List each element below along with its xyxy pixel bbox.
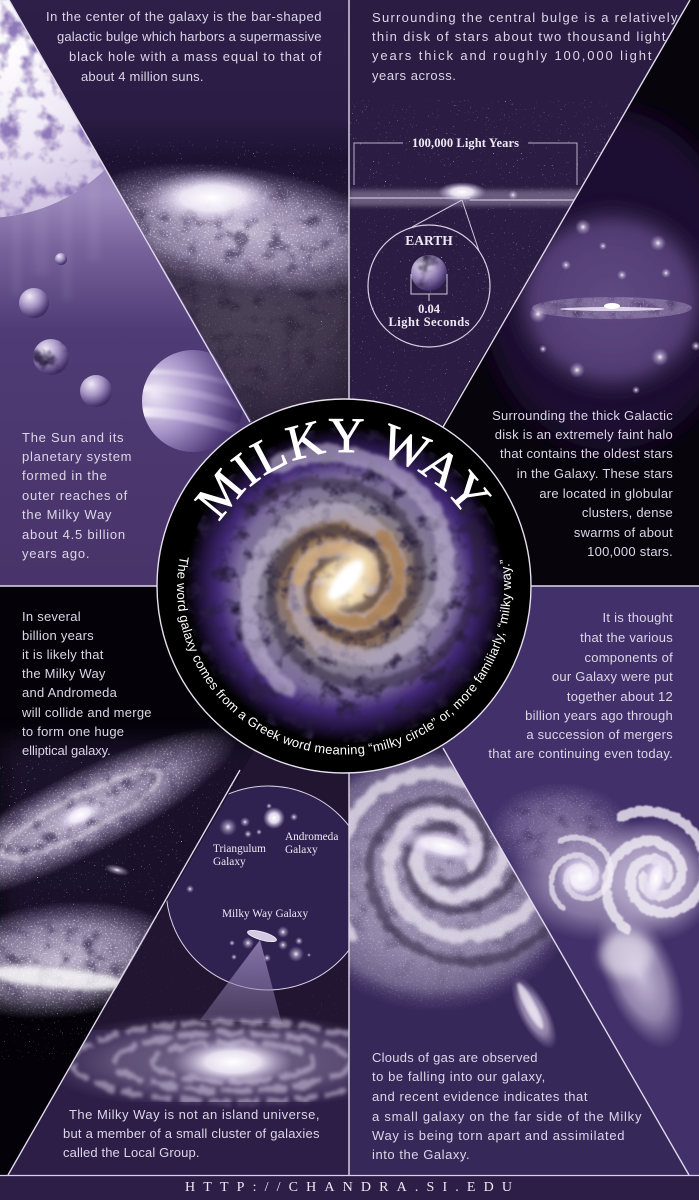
text: halo: 100,000 stars.	[587, 544, 673, 559]
image: merging galaxies	[488, 782, 699, 1061]
title arc path	[220, 452, 478, 540]
text: halo	[492, 408, 673, 559]
panel: disk of stars	[350, 0, 689, 426]
shade behind text	[150, 1102, 315, 1110]
beam	[200, 940, 282, 1024]
text: mergers: that are continuing even today.	[488, 746, 673, 761]
sun rays	[16, 254, 69, 296]
text: clouds of gas: Clouds of gas are observed	[372, 1050, 538, 1065]
image: sun	[0, 0, 106, 218]
text: sun: formed in the	[22, 468, 108, 483]
image: large swirl galaxy	[350, 746, 558, 1008]
text: collision: In several	[22, 609, 81, 624]
text: sun	[22, 430, 132, 561]
text: collision: billion years	[22, 628, 94, 643]
label: andromeda: Andromeda	[285, 831, 338, 843]
text: halo: clusters, dense	[582, 505, 673, 520]
earth circle	[368, 225, 490, 347]
group spots	[186, 803, 311, 962]
planet: small	[55, 253, 67, 265]
text: halo: Surrounding the thick Galactic	[492, 408, 673, 423]
text: mergers	[488, 610, 673, 761]
footer strip	[0, 1175, 699, 1200]
panel: clouds of gas	[350, 746, 688, 1175]
text: clouds of gas	[372, 1050, 642, 1162]
milky way small	[247, 930, 277, 942]
image: halo disk	[529, 219, 699, 394]
text: sun: outer reaches of	[22, 488, 128, 503]
label: triangulum: Galaxy	[213, 856, 246, 868]
panel: sun and planets	[0, 0, 252, 586]
text: halo: that contains the oldest stars	[500, 446, 673, 461]
panel: mergers	[442, 586, 699, 1175]
triangulum galaxy	[220, 818, 236, 836]
andromeda galaxy	[263, 807, 285, 829]
spiral galaxy image	[186, 427, 506, 743]
text: halo: disk is an extremely faint halo	[495, 427, 673, 442]
text: local group: The Milky Way is not an island universe,	[69, 1107, 320, 1122]
text: clouds of gas: to be falling into our galaxy,	[372, 1069, 546, 1084]
text: mergers: It is thought	[603, 610, 673, 625]
text: mergers: that the various	[580, 630, 673, 645]
earth bracket	[411, 274, 447, 301]
text: galactic bulge: black hole with a mass equal to that of	[69, 49, 322, 64]
text: galactic bulge: In the center of the galaxy is the bar-shaped	[46, 9, 322, 24]
labels: local group	[213, 831, 338, 920]
diagram: scale of the disk	[354, 136, 577, 347]
label: earth: EARTH	[405, 233, 453, 248]
image: dust lane	[0, 902, 156, 1018]
text: halo: are located in globular	[539, 486, 673, 501]
caption arc path	[177, 556, 511, 755]
local group circle	[166, 786, 348, 990]
text: halo: swarms of about	[574, 525, 673, 540]
label: milky way galaxy: Milky Way Galaxy	[222, 908, 308, 920]
text: clouds of gas: into the Galaxy.	[372, 1147, 470, 1162]
text: local group	[63, 1107, 320, 1160]
text: galactic bulge: about 4 million suns.	[81, 69, 204, 84]
label: triangulum: Triangulum	[213, 843, 266, 855]
title: MILKY WAY	[194, 418, 492, 522]
text: mergers: billion years ago through	[525, 708, 673, 723]
text: galactic bulge: galactic bulge which harbors a supermassive	[57, 29, 322, 44]
icon: earth	[411, 255, 447, 291]
image: andromeda	[0, 728, 234, 892]
label: light seconds: Light Seconds	[388, 315, 470, 329]
text: local group: called the Local Group.	[63, 1145, 200, 1160]
label: 100,000 light years: 100,000 Light Years	[412, 136, 519, 150]
text: collision: to form one huge	[22, 724, 124, 739]
text: local group: but a member of a small cluster of galaxies	[63, 1126, 320, 1141]
image: galaxy bulge	[112, 164, 348, 419]
text: collision: it is likely that	[22, 647, 104, 662]
text: mergers: our Galaxy were put	[552, 669, 673, 684]
text: mergers: components of	[584, 650, 673, 665]
text: sun: years ago.	[22, 546, 90, 561]
text: disk: Surrounding the central bulge is a relatively	[372, 10, 678, 25]
text: collision	[21, 609, 152, 758]
planet: earth-like	[33, 339, 69, 375]
label: 0.04: 0.04	[418, 302, 441, 316]
text: disk: thin disk of stars about two thousand light	[372, 29, 666, 44]
image: small companion galaxy	[105, 864, 129, 876]
image: small galaxy	[512, 979, 556, 1048]
text: disk: years thick and roughly 100,000 light	[372, 48, 652, 63]
milky way disc	[156, 398, 532, 774]
planet: venus-like	[80, 375, 112, 407]
image: galaxy face	[64, 1015, 348, 1108]
text: disk: years across.	[372, 68, 456, 83]
text: collision: and Andromeda	[22, 685, 118, 700]
text: sun: about 4.5 billion	[22, 527, 126, 542]
planet: mars-like	[19, 288, 49, 318]
panel: local group	[9, 750, 348, 1175]
caption: The word galaxy comes from a Greek word meaning “milky circle” or, more familiarly, “milky way.”	[177, 558, 514, 756]
planet: jupiter	[142, 350, 245, 452]
zoom lines	[412, 200, 479, 251]
text: sun: the Milky Way	[22, 507, 112, 522]
text: galactic bulge	[46, 9, 322, 84]
text: sun: planetary system	[22, 449, 132, 464]
panel: halo	[442, 0, 699, 585]
panel: galactic bulge	[10, 0, 348, 422]
text: clouds of gas: Way is being torn apart and assimilated	[372, 1128, 625, 1143]
panel: andromeda collision	[0, 720, 254, 1068]
text: disk	[372, 10, 678, 83]
text: clouds of gas: a small galaxy on the far side of the Milky	[372, 1109, 642, 1124]
text: collision: will collide and merge	[21, 705, 152, 720]
bracket	[354, 143, 577, 185]
text: clouds of gas: and recent evidence indicates that	[372, 1089, 588, 1104]
image: edge-on disk	[349, 182, 581, 206]
text: sun: The Sun and its	[22, 430, 124, 445]
text: halo: in the Galaxy. These stars	[517, 466, 673, 481]
footer url: HTTP://CHANDRA.SI.EDU	[185, 1180, 512, 1195]
text: collision: the Milky Way	[22, 666, 106, 681]
label: andromeda: Galaxy	[285, 844, 318, 856]
text: mergers: a succession of mergers	[526, 727, 673, 742]
text: mergers: together about 12	[567, 689, 673, 704]
text: collision: elliptical galaxy.	[22, 743, 111, 758]
